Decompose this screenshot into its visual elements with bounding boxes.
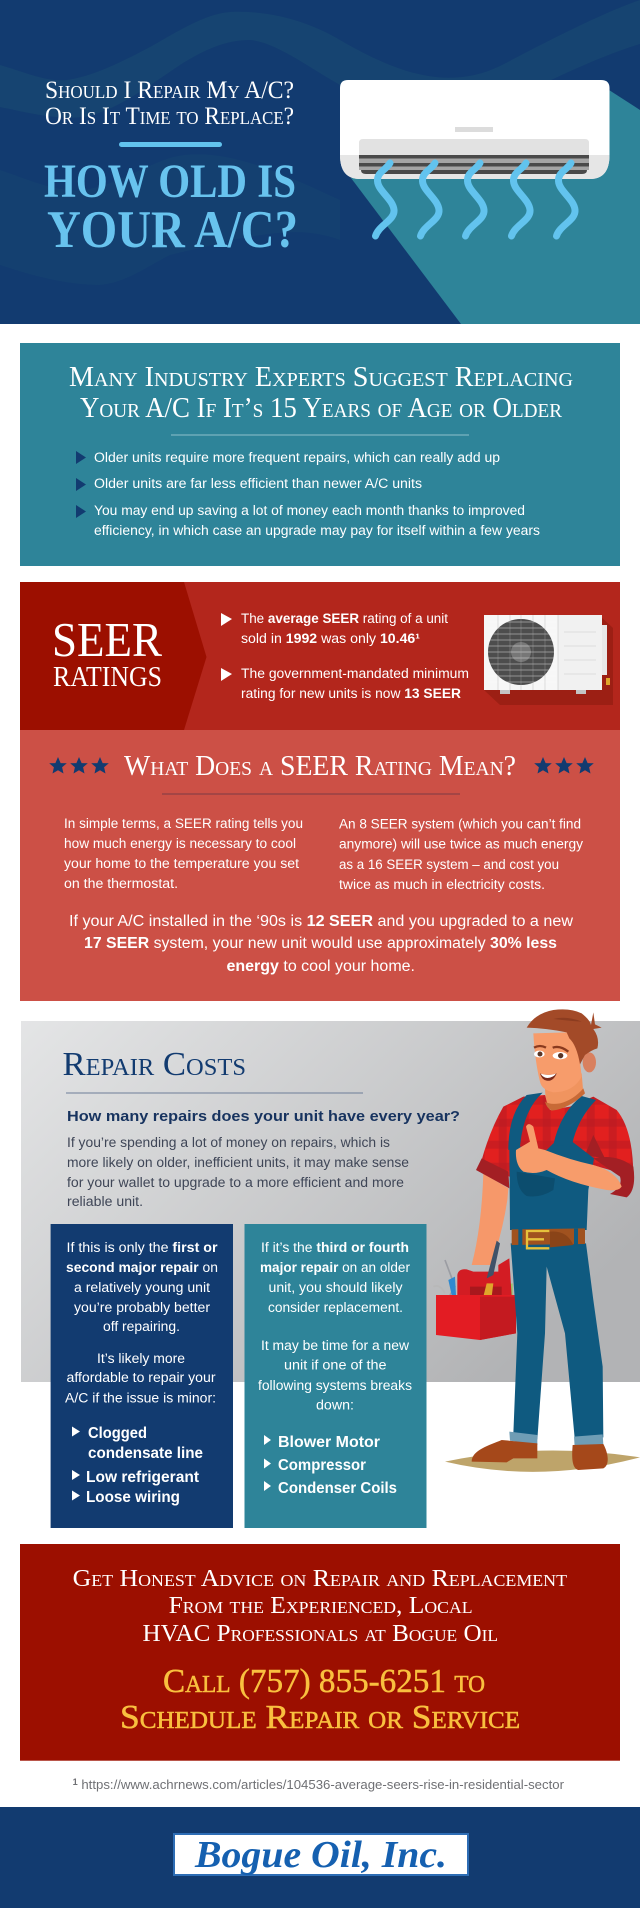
bullet list: minor issues: condensate line bbox=[88, 1445, 203, 1462]
hero title text: Should I Repair My A/C? bbox=[45, 77, 294, 104]
hero title text bbox=[44, 77, 298, 259]
bullet list: reasons bbox=[76, 450, 540, 538]
text block: left column: how much energy is necessary to cool bbox=[64, 836, 296, 851]
box: replacement advice: down: bbox=[316, 1398, 354, 1412]
icon: air conditioner bbox=[340, 80, 610, 236]
bullet list: minor issues bbox=[72, 1425, 203, 1506]
teal light beam bbox=[351, 90, 640, 324]
box: replacement advice: unit if one of the bbox=[284, 1358, 386, 1372]
subheading: repairs per year: How many repairs does your unit have every year? bbox=[67, 1108, 460, 1125]
box: replacement advice: unit, you should likely bbox=[268, 1280, 403, 1295]
torso bbox=[476, 1093, 634, 1248]
overall bib and straps bbox=[508, 1093, 596, 1230]
box: minor repair advice: A/C if the issue is minor: bbox=[65, 1390, 216, 1406]
panel: experts suggest replacing bbox=[20, 343, 620, 566]
panel: call to action bbox=[20, 1544, 620, 1761]
icon: left stars bbox=[49, 757, 109, 774]
bullet list: major components: Compressor bbox=[278, 1457, 366, 1474]
heading: replace at 15 years: Your A/C If It’s 15 Years of Age or Older bbox=[80, 393, 563, 424]
box: replacement advice bbox=[244, 1224, 426, 1528]
phone call to action: Schedule Repair or Service bbox=[120, 1699, 520, 1736]
heading: what does a SEER rating mean: What Does a SEER Rating Mean? bbox=[124, 751, 516, 782]
heading: SEER ratings: SEER bbox=[52, 612, 162, 667]
heading: replace at 15 years: Many Industry Experts Suggest Replacing bbox=[69, 362, 573, 393]
bullet list: minor issues: Low refrigerant bbox=[86, 1469, 199, 1486]
footnote: 1 bbox=[73, 1777, 78, 1787]
box: replacement advice: major repair on an older bbox=[260, 1260, 410, 1275]
bullet list: major components: Condenser Coils bbox=[278, 1480, 397, 1497]
bullet list: minor issues: Clogged bbox=[88, 1425, 147, 1442]
heading: honest advice: HVAC Professionals at Bogue Oil bbox=[142, 1620, 498, 1647]
heading: honest advice bbox=[73, 1565, 568, 1647]
phone call to action: Call (757) 855-6251 to bbox=[163, 1663, 485, 1700]
text block: 30 percent less energy bbox=[69, 913, 574, 975]
panel: what a SEER rating means bbox=[20, 730, 620, 1001]
heading: SEER ratings: RATINGS bbox=[53, 661, 162, 693]
bullet list: major components bbox=[264, 1434, 397, 1497]
text block: left column: on the thermostat. bbox=[64, 876, 178, 891]
shoes and cuffs bbox=[472, 1432, 608, 1470]
illustration: repairman with toolbox bbox=[433, 1009, 640, 1472]
text block: 30 percent less energy: energy to cool your home. bbox=[226, 958, 415, 975]
heading: honest advice: From the Experienced, Local bbox=[169, 1592, 473, 1619]
toolbox bbox=[436, 1241, 516, 1340]
box: minor repair advice: affordable to repair your bbox=[66, 1370, 216, 1385]
text block: left column bbox=[64, 816, 303, 891]
heading: repair costs: Repair Costs bbox=[62, 1046, 246, 1083]
panel: SEER ratings bbox=[20, 582, 620, 730]
bullet list: reasons: You may end up saving a lot of money each month thanks to improved bbox=[94, 503, 525, 518]
box: minor repair advice: off repairing. bbox=[103, 1319, 180, 1334]
SEER facts: rating for new units is now 13 SEER bbox=[241, 686, 461, 701]
heading: SEER ratings bbox=[52, 612, 162, 693]
text block: right column: An 8 SEER system (which you can’t find bbox=[339, 816, 581, 832]
hero title text: Or Is It Time to Replace? bbox=[45, 103, 294, 130]
footer bbox=[0, 1807, 640, 1908]
SEER facts bbox=[221, 611, 469, 701]
left arm bbox=[472, 1173, 508, 1265]
SEER facts: The government-mandated minimum bbox=[241, 666, 469, 681]
box: minor repair advice: It’s likely more bbox=[97, 1351, 185, 1366]
toolbox tools bbox=[433, 1260, 513, 1295]
box: minor repair advice: If this is only the first or bbox=[66, 1240, 218, 1255]
text block: 30 percent less energy: If your A/C installed in the ‘90s is 12 SEER and you upgraded to a new bbox=[69, 913, 574, 930]
footnote: https://www.achrnews.com/articles/104536-average-seers-rise-in-residential-sector bbox=[78, 1777, 565, 1792]
shirt bbox=[482, 1095, 633, 1177]
bullet list: minor issues: Loose wiring bbox=[86, 1489, 180, 1506]
box: replacement advice: following systems breaks bbox=[258, 1378, 412, 1393]
text block: left column: In simple terms, a SEER rating tells you bbox=[64, 816, 303, 831]
trousers bbox=[511, 1243, 603, 1442]
icon: outdoor condenser unit bbox=[484, 615, 613, 705]
box: minor repair advice: a relatively young unit bbox=[74, 1280, 210, 1295]
belt and buckle bbox=[512, 1228, 585, 1248]
SEER facts: sold in 1992 was only 10.46¹ bbox=[241, 631, 421, 646]
text block: 30 percent less energy: 17 SEER system, your new unit would use approximately 30% less bbox=[84, 935, 557, 952]
head bbox=[527, 1009, 602, 1111]
text block: repair intro: If you’re spending a lot of money on repairs, which is bbox=[67, 1135, 390, 1150]
box: replacement advice: consider replacement. bbox=[268, 1300, 403, 1315]
text block: repair intro: more likely on older, inefficient units, it may make sense bbox=[67, 1155, 409, 1170]
text block: left column: your home to the temperature you set bbox=[64, 856, 299, 871]
bullet list: major components: Blower Motor bbox=[278, 1434, 380, 1451]
heading: honest advice: Get Honest Advice on Repair and Replacement bbox=[73, 1565, 568, 1592]
panel: repair costs bbox=[21, 1021, 640, 1528]
heading: replace at 15 years bbox=[69, 362, 573, 424]
hero title text: HOW OLD IS bbox=[44, 155, 296, 208]
text block: repair intro: reliable unit. bbox=[67, 1194, 143, 1209]
bullet list: reasons: efficiency, in which case an upgrade may pay for itself within a few years bbox=[94, 523, 540, 538]
hero title text: YOUR A/C? bbox=[47, 201, 298, 259]
hero banner bbox=[0, 0, 640, 324]
forearm and thumbs up bbox=[516, 1124, 622, 1190]
text block: repair intro bbox=[67, 1135, 409, 1209]
box: replacement advice: It may be time for a new bbox=[261, 1338, 409, 1353]
box: minor repair advice: you’re probably better bbox=[74, 1300, 211, 1315]
text block: right column: anymore) will use twice as much energy bbox=[339, 836, 583, 852]
text block: repair intro: for your wallet to upgrade to a more efficient and more bbox=[67, 1175, 404, 1190]
text block: right column bbox=[339, 816, 583, 892]
text block: right column: as a 16 SEER system – and cost you bbox=[339, 857, 559, 872]
bullet list: reasons: Older units are far less efficient than newer A/C units bbox=[94, 476, 422, 491]
bullet list: reasons: Older units require more frequent repairs, which can really add up bbox=[94, 450, 500, 465]
box: minor repair advice: second major repair on bbox=[66, 1260, 218, 1275]
box: minor repair advice bbox=[51, 1224, 233, 1528]
box: replacement advice: If it’s the third or fourth bbox=[261, 1240, 409, 1255]
text block: right column: twice as much in electricity costs. bbox=[339, 877, 545, 892]
SEER facts: The average SEER rating of a unit bbox=[241, 611, 448, 626]
icon: cold air waves bbox=[376, 163, 575, 236]
logo: Bogue Oil, Inc.: Bogue Oil, Inc. bbox=[194, 1834, 447, 1876]
phone call to action bbox=[120, 1663, 520, 1736]
icon: right stars bbox=[534, 757, 594, 774]
